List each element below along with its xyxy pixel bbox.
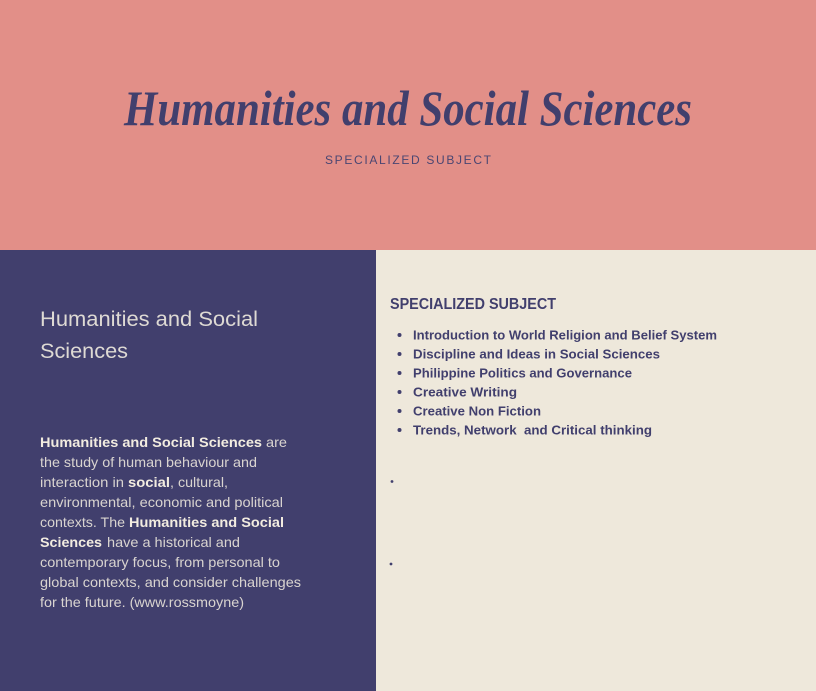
- panel: specialized subject list: [376, 250, 816, 691]
- list heading: SPECIALIZED SUBJECT: [390, 296, 556, 313]
- description text: environmental, economic and political: [40, 494, 283, 510]
- empty bullet: [390, 563, 392, 565]
- panel: header banner: [0, 0, 816, 250]
- left heading: Sciences: [40, 340, 128, 363]
- description text: contexts. The: [40, 514, 125, 530]
- subject list: [398, 328, 717, 438]
- description text: interaction in: [40, 474, 124, 490]
- subject list: Creative Non Fiction: [413, 404, 541, 418]
- description text: contemporary focus, from personal to: [40, 554, 280, 570]
- description text: [40, 434, 301, 610]
- description text: have a historical and: [107, 534, 240, 550]
- left heading: Humanities and Social: [40, 308, 258, 331]
- left heading: [40, 308, 258, 363]
- description text: for the future. (www.rossmoyne): [40, 594, 244, 610]
- subject list: Discipline and Ideas in Social Sciences: [413, 346, 660, 362]
- description text: Sciences: [40, 534, 102, 550]
- subtitle: SPECIALIZED SUBJECT: [325, 153, 492, 167]
- panel: left description: [0, 250, 376, 691]
- description text: are: [266, 434, 287, 450]
- description text: the study of human behaviour and: [40, 454, 257, 470]
- subject list: Introduction to World Religion and Belief System: [413, 328, 717, 342]
- title: Humanities and Social Sciences: [123, 80, 692, 136]
- description text: Humanities and Social Sciences: [40, 434, 262, 450]
- subject list: Trends, Network and Critical thinking: [413, 422, 652, 438]
- subject list: Philippine Politics and Governance: [413, 366, 632, 380]
- description text: global contexts, and consider challenges: [40, 574, 301, 590]
- description text: , cultural,: [170, 474, 228, 490]
- subject list: Creative Writing: [413, 384, 517, 400]
- description text: social: [128, 474, 170, 490]
- description text: Humanities and Social: [129, 514, 284, 530]
- empty bullet: [391, 480, 393, 483]
